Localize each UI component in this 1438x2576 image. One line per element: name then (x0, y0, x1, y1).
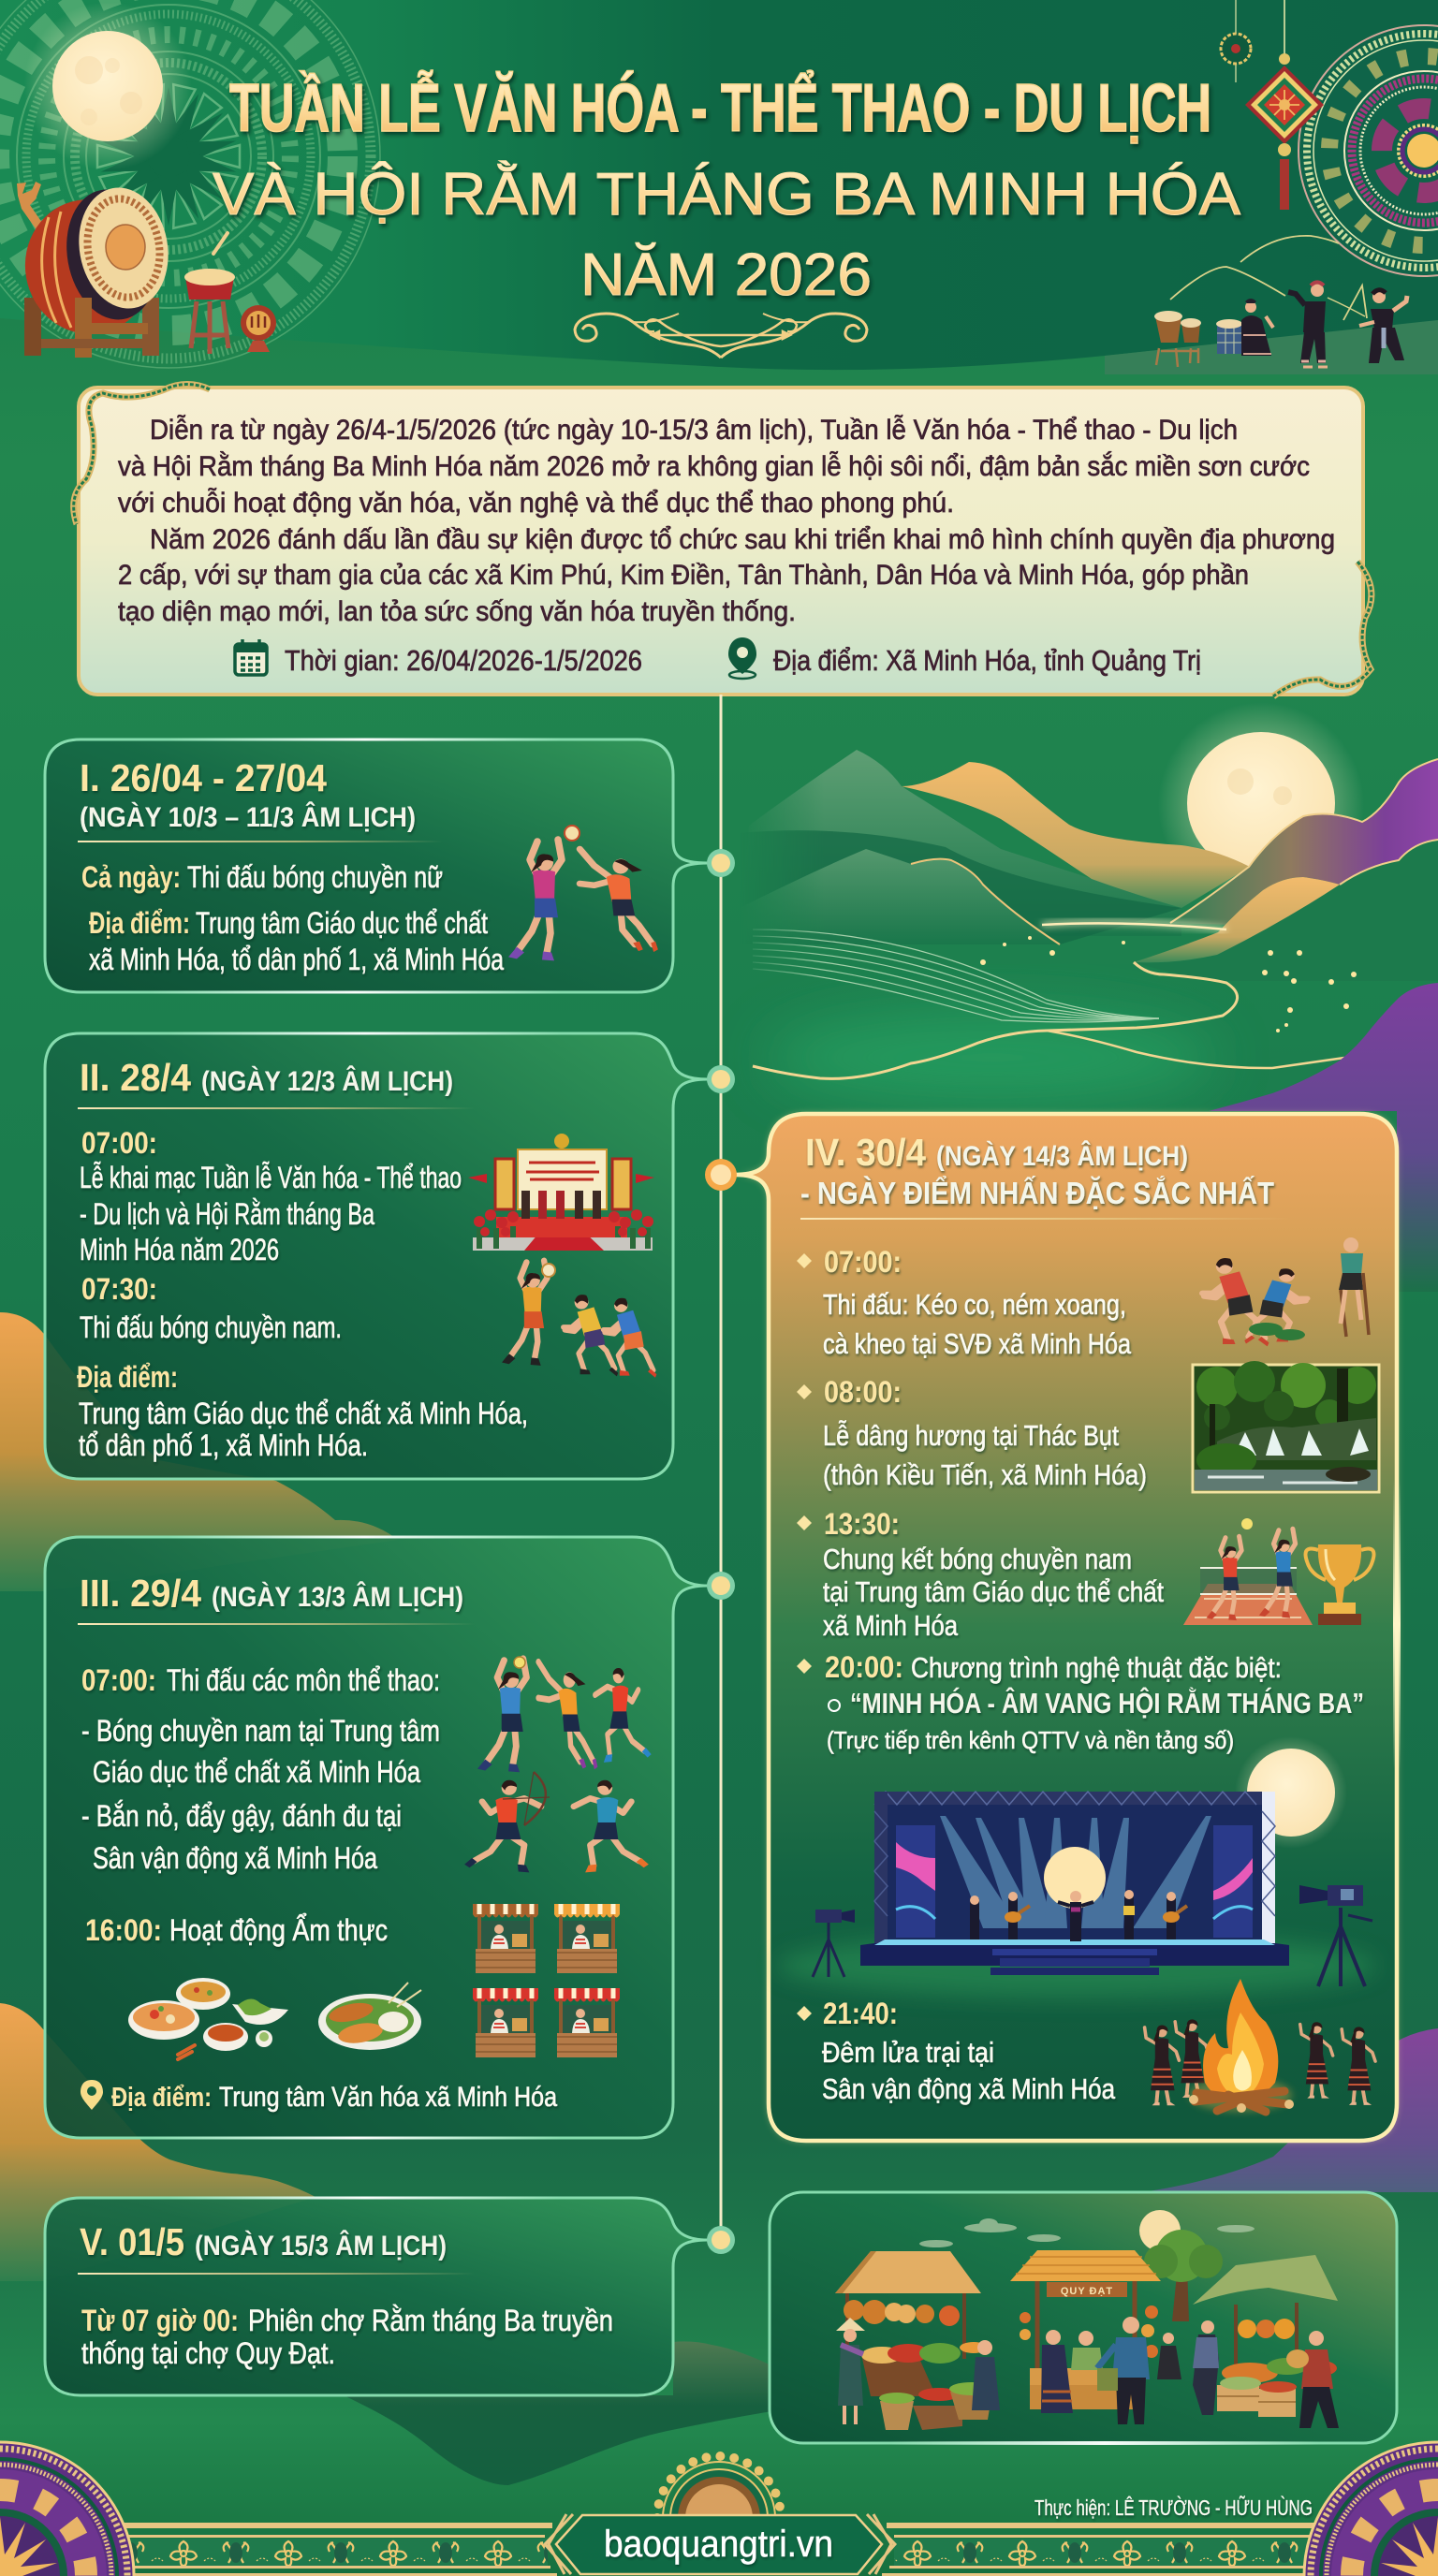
small drum and stick (184, 233, 235, 354)
node V (707, 2226, 735, 2254)
schedule text: Địa điểm: (89, 906, 190, 940)
title: VÀ HỘI RẰM THÁNG BA MINH HÓA (213, 160, 1240, 227)
icon: sports players row 1 (477, 1657, 652, 1772)
bronze drum star (97, 84, 240, 228)
schedule text: - Bắn nỏ, đẩy gậy, đánh đu tại (81, 1799, 402, 1833)
item 13:30: xã Minh Hóa (823, 1609, 959, 1642)
schedule text: Phiên chợ Rằm tháng Ba truyền (248, 2304, 613, 2337)
schedule text: Minh Hóa năm 2026 (80, 1233, 279, 1266)
icon: campfire (1189, 1979, 1294, 2113)
schedule text (81, 2304, 613, 2370)
footer band right (882, 2523, 1315, 2576)
item 07:00 (797, 1245, 1132, 1360)
bronze drum bottom right (1303, 2441, 1438, 2576)
schedule text: Thi đấu bóng chuyền nam. (80, 1310, 342, 1344)
schedule text: Lễ khai mạc Tuần lễ Văn hóa - Thể thao (80, 1161, 462, 1194)
heading: V. 01/5 (80, 2220, 184, 2263)
timeline spine (719, 695, 723, 2240)
schedule text: Giáo dục thể chất xã Minh Hóa (93, 1755, 420, 1789)
intro paragraph: Diễn ra từ ngày 26/4-1/5/2026 (tức ngày 10-15/3 âm lịch), Tuần lễ Văn hóa - Thể thao - Du lịch (150, 415, 1238, 446)
panel: introduction (74, 384, 1372, 696)
title (213, 70, 1240, 308)
heading: (NGÀY 13/3 ÂM LỊCH) (212, 1581, 463, 1613)
title: NĂM 2026 (580, 241, 872, 308)
item 13:30: Chung kết bóng chuyền nam (823, 1543, 1132, 1575)
panel: III 29/4 (45, 1535, 708, 2140)
time: Thời gian: 26/04/2026-1/5/2026 (285, 644, 642, 677)
schedule text: Từ 07 giờ 00: (81, 2304, 239, 2337)
icon: food stalls (473, 1904, 620, 2057)
moonlit mountain scene (740, 702, 1438, 1292)
item 08:00: 08:00: (824, 1375, 902, 1409)
item 20:00: Chương trình nghệ thuật đặc biệt: (911, 1651, 1282, 1684)
node II (707, 1065, 735, 1093)
heading (800, 1131, 1292, 1220)
bronze drum pattern top left (0, 0, 380, 368)
item 07:00: 07:00: (824, 1245, 902, 1279)
heading: - NGÀY ĐIỂM NHẤN ĐẶC SẮC NHẤT (800, 1176, 1274, 1210)
title ornament (575, 314, 867, 358)
intro paragraph: với chuỗi hoạt động văn hóa, văn nghệ và thể dục thể thao phong phú. (118, 488, 954, 519)
moon behind stage (1235, 1736, 1347, 1849)
intro paragraph: và Hội Rằm tháng Ba Minh Hóa năm 2026 mở ra không gian lễ hội sôi nổi, đậm bản sắc miền sơn cước (118, 451, 1310, 482)
schedule text: Cả ngày: (81, 860, 181, 894)
location row: Trung tâm Văn hóa xã Minh Hóa (219, 2082, 557, 2113)
icon: men volleyball (502, 1261, 656, 1378)
footer band left (124, 2523, 557, 2576)
schedule text: Địa điểm: (77, 1360, 178, 1394)
stage illustration (860, 1792, 1289, 1975)
schedule text: - Du lịch và Hội Rằm tháng Ba (80, 1197, 374, 1231)
stage performers (970, 1890, 1187, 1941)
item 21:40: Đêm lửa trại tại (822, 2036, 994, 2069)
schedule text: 16:00: (85, 1913, 162, 1947)
schedule text: Thi đấu các môn thể thao: (167, 1663, 440, 1697)
big festival drum (15, 181, 178, 358)
icon: grilled plate (318, 1983, 421, 2050)
schedule text: xã Minh Hóa, tổ dân phố 1, xã Minh Hóa (89, 943, 504, 976)
intro paragraph (118, 415, 1335, 627)
icon: trophy (1305, 1544, 1374, 1625)
icon: dishes (128, 1978, 288, 2059)
schedule text: Sân vận động xã Minh Hóa (93, 1841, 377, 1875)
heading: IV. 30/4 (805, 1131, 926, 1174)
icon: map pin (728, 637, 756, 679)
node III (707, 1572, 735, 1600)
item 20:00: (Trực tiếp trên kênh QTTV và nền tảng số) (827, 1726, 1234, 1754)
heading (78, 1572, 475, 1625)
schedule text: 07:00: (81, 1126, 157, 1160)
timeline nodes (705, 849, 737, 2254)
bronze drum pattern top right (1299, 25, 1438, 276)
schedule text: thống tại chợ Quy Đạt. (81, 2336, 335, 2370)
panel: market illustration (770, 2192, 1397, 2445)
right stall (1193, 2255, 1339, 2428)
item 07:00: cà kheo tại SVĐ xã Minh Hóa (823, 1327, 1132, 1360)
intro paragraph: Năm 2026 đánh dấu lần đầu sự kiện được tổ chức sau khi triển khai mô hình chính quyền địa phương (150, 524, 1335, 555)
icon: women volleyball (508, 826, 658, 960)
round ornament (241, 305, 276, 352)
item 07:00: Thi đấu: Kéo co, ném xoang, (823, 1288, 1126, 1321)
bronze drum bottom left (0, 2441, 135, 2576)
schedule text (81, 860, 504, 976)
photo: Thac But waterfall (1193, 1361, 1379, 1492)
diamond lantern (1245, 0, 1324, 210)
moon (1139, 2210, 1181, 2251)
icon: left camera (813, 1910, 855, 1977)
icon: dancers left (1145, 2019, 1209, 2105)
heading (78, 2220, 475, 2275)
schedule text: tổ dân phố 1, xã Minh Hóa. (79, 1428, 368, 1462)
ground glow (777, 1934, 1376, 1998)
heading (78, 756, 443, 842)
heading: I. 26/04 - 27/04 (80, 756, 327, 799)
heading: (NGÀY 14/3 ÂM LỊCH) (936, 1140, 1188, 1172)
icon: opening ceremony stage (468, 1134, 654, 1251)
schedule text: Hoạt động Ẩm thực (169, 1913, 388, 1947)
location: Địa điểm: Xã Minh Hóa, tỉnh Quảng Trị (773, 644, 1201, 677)
schedule text: Trung tâm Giáo dục thể chất (196, 906, 488, 940)
logo badge (545, 2514, 895, 2574)
item 21:40: Sân vận động xã Minh Hóa (822, 2072, 1116, 2105)
dragon border top left (74, 384, 210, 524)
icon: tug of war and stilts (1202, 1237, 1369, 1346)
schedule text: Trung tâm Giáo dục thể chất xã Minh Hóa, (79, 1397, 528, 1430)
icon: right camera (1299, 1885, 1372, 1986)
item 13:30 (797, 1507, 1164, 1642)
credit: Thực hiện: LÊ TRƯỜNG - HỮU HÙNG (1034, 2495, 1313, 2520)
intro paragraph: tạo diện mạo mới, lan tỏa sức sống văn hóa truyền thống. (118, 596, 796, 627)
small mandala behind logo (657, 2456, 781, 2518)
node I (707, 849, 735, 877)
buyer woman and child (972, 2333, 1181, 2410)
item 13:30: tại Trung tâm Giáo dục thể chất (823, 1575, 1164, 1608)
heading: (NGÀY 10/3 – 11/3 ÂM LỊCH) (80, 801, 416, 833)
moon top left (23, 2, 192, 170)
heading: (NGÀY 15/3 ÂM LỊCH) (195, 2230, 447, 2261)
tree (1144, 2230, 1223, 2321)
logo badge: baoquangtri.vn (604, 2524, 833, 2565)
heading: II. 28/4 (80, 1056, 191, 1099)
item 20:00 (797, 1650, 1364, 1754)
schedule text: 07:30: (81, 1272, 157, 1306)
schedule text: 07:00: (81, 1663, 156, 1697)
hanging small ornament (1221, 0, 1251, 82)
icon: sports players row 2 (464, 1772, 649, 1872)
item 21:40: 21:40: (823, 1997, 898, 2030)
ground right and mountain lines (1105, 236, 1438, 374)
icon: dancers right (1300, 2022, 1375, 2105)
panel: I 26/04 - 27/04 (45, 738, 708, 994)
icon: volleyball court (1183, 1518, 1313, 1625)
panel: II 28/4 (45, 1032, 708, 1479)
location row: Địa điểm: (111, 2083, 212, 2113)
dragon border bottom right (1273, 562, 1372, 696)
item 13:30: 13:30: (824, 1507, 900, 1541)
item 21:40 (797, 1997, 1116, 2105)
man in blue (1097, 2317, 1150, 2424)
item 08:00: (thôn Kiều Tiến, xã Minh Hóa) (823, 1458, 1147, 1491)
icon: calendar (235, 639, 267, 675)
item 08:00: Lễ dâng hương tại Thác Bụt (823, 1419, 1119, 1452)
panel: V 01/5 (45, 2196, 708, 2395)
center stall: QUY ĐẠT (1061, 2286, 1113, 2297)
intro paragraph: 2 cấp, với sự tham gia của các xã Kim Phú, Kim Điền, Tân Thành, Dân Hóa và Minh Hóa, góp phần (118, 560, 1249, 591)
musicians (1154, 283, 1407, 367)
item 08:00 (797, 1375, 1147, 1491)
schedule text: - Bóng chuyền nam tại Trung tâm (81, 1714, 440, 1748)
heading (78, 1056, 475, 1109)
item 20:00: 20:00: (825, 1650, 903, 1684)
center stall (1010, 2250, 1161, 2413)
left stall (835, 2251, 994, 2430)
schedule text: Thi đấu bóng chuyền nữ (187, 860, 443, 894)
heading: III. 29/4 (80, 1572, 201, 1615)
schedule text (77, 1126, 528, 1462)
heading: (NGÀY 12/3 ÂM LỊCH) (201, 1065, 453, 1097)
panel: IV 30/4 (735, 1114, 1401, 2141)
node IV (705, 1159, 737, 1191)
clouds (919, 2218, 1255, 2247)
vendor woman with hat (836, 2318, 865, 2424)
schedule text (81, 1663, 440, 1947)
location row (81, 2080, 557, 2113)
